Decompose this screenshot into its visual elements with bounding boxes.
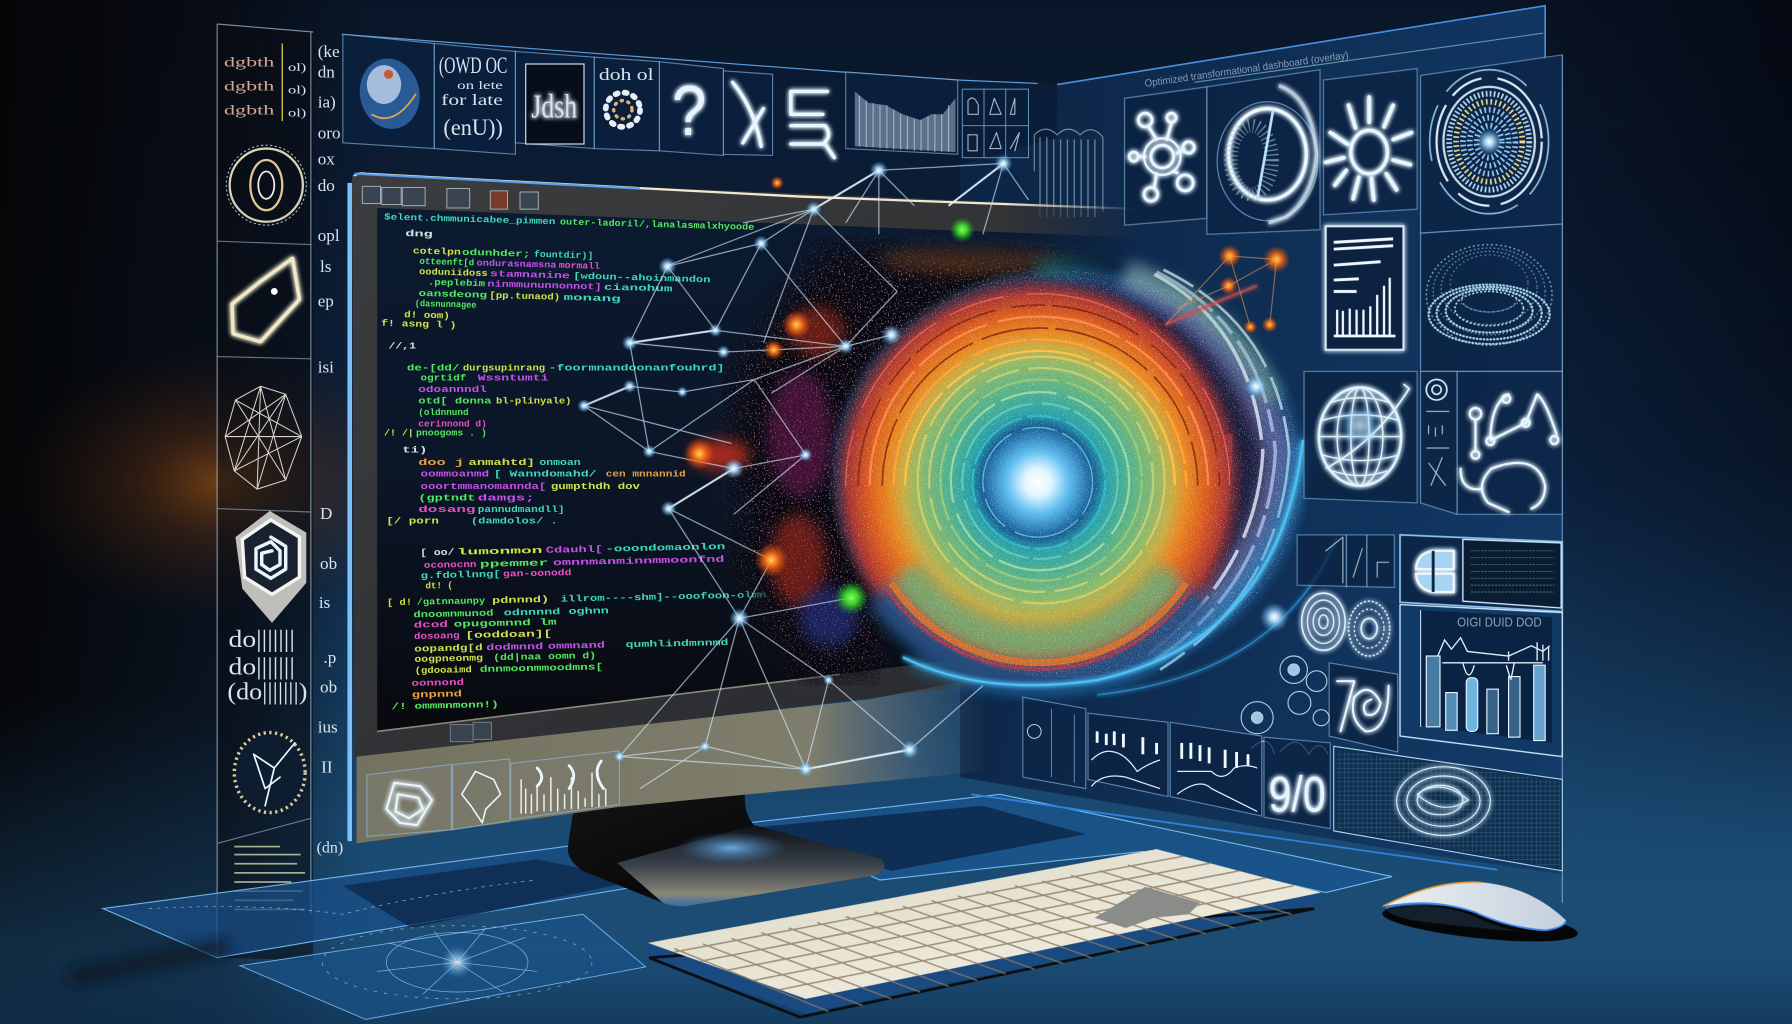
code lines: upper block: stamnanine — [490, 268, 571, 281]
mesh tile with oval — [1334, 746, 1562, 871]
code lines: middle block: durgsupinrang — [463, 362, 545, 373]
code lines: middle block: gumpthdh dov — [551, 481, 641, 492]
outer streaks — [914, 270, 1303, 684]
code lines: lower block — [386, 540, 769, 712]
text: narrow label column: ls — [320, 257, 332, 276]
code lines: lower block: oonnond — [411, 677, 464, 689]
right panel tiles — [1023, 55, 1562, 871]
code lines: lower block: [ooddoan][ — [465, 628, 552, 641]
icon: eye cluster — [1241, 656, 1329, 754]
code lines: middle block: ti) — [402, 445, 427, 456]
text: colored rows: ol) — [288, 85, 307, 97]
icon: orb cell — [343, 34, 434, 149]
code lines: middle block: damgs; — [478, 493, 535, 504]
code lines: middle block: doo j — [418, 457, 464, 468]
code lines: upper block: ninmmununnonnot] — [487, 278, 602, 293]
core star — [986, 431, 1089, 534]
burst on floor — [149, 880, 592, 999]
code lines: lower block: g.fdollnng[ — [421, 569, 501, 581]
code lines: middle block: (gptndt — [418, 493, 475, 504]
text: narrow label column: oro — [318, 123, 341, 142]
stat tile — [1264, 737, 1330, 829]
icon: dotted burst: doh ol — [599, 65, 654, 84]
text: cell label — [434, 43, 515, 154]
code lines: middle block: -foormnandoonanfouhrd] — [549, 362, 725, 373]
text: cell label: (OWD OC — [439, 53, 507, 78]
chart: mini line chart two — [1170, 722, 1262, 816]
text: narrow label column: ep — [318, 291, 334, 310]
code lines: upper block: oansdeong — [418, 288, 487, 301]
network edges — [584, 163, 1029, 789]
text: narrow label column: ius — [318, 718, 338, 737]
code lines: middle block: odoannndl — [418, 384, 488, 395]
code lines: middle block: [ Wanndomahd/ — [494, 469, 597, 480]
code lines: upper block: $elent.chmmunicabee_pimmen — [384, 211, 556, 227]
text: narrow label column: opl — [318, 226, 340, 245]
key surface — [648, 849, 1321, 999]
text: colored rows: dgbth — [224, 54, 275, 69]
outer blue tail — [903, 286, 1337, 695]
chart: document with bars — [1326, 226, 1403, 350]
code lines: lower block: oconocnn — [424, 559, 477, 571]
text: narrow label column: is — [319, 593, 331, 612]
panel: top strip — [342, 34, 1103, 217]
chart heading: OIGI DUID DOD — [1457, 615, 1542, 629]
chart: mini line chart one — [1088, 713, 1168, 797]
icon: window — [1416, 551, 1454, 592]
code lines: middle block: /! /| — [384, 427, 414, 438]
code lines: lower block: (dd|naa oomn d) — [493, 650, 596, 663]
chin buttons — [450, 722, 491, 742]
text: repeated rows: (do|||||||) — [227, 679, 307, 705]
network nodes — [577, 154, 1290, 777]
text: colored rows: ol) — [288, 108, 307, 120]
chart: bar chart panel — [1400, 605, 1562, 757]
code lines: upper block: [pp.tunaod) — [489, 290, 560, 303]
code lines: lower block: (gdooaimd — [415, 664, 472, 676]
code lines: middle block: dosang — [418, 504, 475, 515]
code lines: lower block: dodmnnd — [486, 641, 543, 653]
icon: x glyph — [723, 71, 773, 155]
mouse — [1381, 882, 1579, 948]
code lines: lower block: lumonmon — [457, 545, 543, 558]
text: narrow label column: .p — [323, 648, 336, 667]
text: colored rows: ol) — [288, 62, 307, 74]
code lines: middle block: cerinnond d) — [418, 418, 487, 429]
code lines: lower block: Cdauhl[ — [546, 544, 603, 556]
text: narrow label column: ob — [320, 678, 337, 697]
icon: split circle — [1207, 70, 1320, 234]
code lines: lower block: dnoomnmunod — [413, 608, 494, 620]
icon: spiral hexagon badge — [235, 511, 306, 623]
stat tile: 9/0 — [1269, 765, 1326, 822]
code lines: upper block: fountdir)] — [534, 249, 594, 261]
speckle texture — [834, 270, 1303, 678]
text: colored rows — [224, 43, 307, 121]
code lines: lower block: /! ommmnmonn!) — [391, 699, 499, 712]
monitor stand — [568, 789, 885, 907]
text: cell label: for late — [441, 92, 503, 109]
icon: jdsh — [515, 51, 594, 149]
code lines: upper block: [wdoun--ahoinmandon — [573, 270, 711, 285]
icon: twin spirals — [1302, 593, 1390, 656]
code lines: upper block: outer-ladoril/,lanalasmalxhyoode — [560, 216, 755, 233]
text: repeated rows: do||||||| — [229, 654, 295, 680]
text: narrow label column: (dn) — [317, 840, 343, 857]
code lines: lower block: omnnmanminnmmoonfnd — [553, 554, 724, 568]
text: narrow label column — [317, 42, 343, 857]
code lines: middle block: //,1 — [389, 341, 417, 352]
mini chart left column — [1023, 697, 1086, 789]
icon: molecule network — [1125, 87, 1207, 225]
monitor bezel and screen — [352, 173, 1143, 760]
text: narrow label column: ox — [318, 150, 335, 169]
window buttons — [362, 186, 538, 209]
mini tiles — [1297, 535, 1394, 587]
keyboard — [648, 849, 1322, 1017]
code lines: upper block: cotelpn — [413, 245, 461, 258]
code lines: upper block: mormall — [559, 260, 601, 272]
window tile — [1400, 535, 1562, 611]
code lines: upper block: ooduniidoss — [419, 266, 488, 279]
center gap — [1095, 887, 1200, 928]
code lines: upper block: ondurasnamsna — [476, 257, 557, 271]
code lines: lower block: ommnand — [548, 640, 605, 652]
rainbow disc — [830, 274, 1246, 690]
code lines: upper block: odunhder; — [462, 247, 531, 260]
outer disc — [826, 263, 1311, 685]
text: colored rows: dgbth — [224, 102, 275, 117]
code lines: lower block: [ oo/ — [420, 547, 455, 558]
text: narrow label column: II — [321, 758, 333, 777]
text: narrow label column: (ke — [318, 42, 340, 61]
code lines: middle block: Wssntumti — [478, 373, 549, 384]
icon: globe — [1304, 371, 1417, 503]
code lines: middle block: ooortmmanomannda[ — [421, 481, 546, 492]
icon: node arcs — [1457, 371, 1562, 514]
panel: floor sheets — [69, 794, 1497, 1019]
code lines: middle block: pnoogoms . ) — [416, 427, 487, 438]
code lines: lower block: qumhlindmnnmd — [625, 637, 729, 650]
code lines: middle block: anmahtd] — [469, 457, 535, 468]
code lines: middle block: (oldnnund — [418, 407, 469, 418]
code lines: upper block: monang — [563, 292, 621, 304]
icon: stacked glyph — [791, 91, 834, 158]
code lines: upper block: otteenft[d — [419, 256, 474, 268]
panel: left column — [217, 24, 313, 960]
code lines: lower block: gnpnnd — [412, 688, 462, 700]
code lines: lower block: gan-oonodd — [503, 567, 572, 580]
monitor — [350, 173, 1143, 907]
icon: wireframe polygon — [225, 386, 302, 489]
code lines: middle block: pannudmandll] — [478, 504, 565, 515]
lower spiral bands — [880, 571, 1198, 678]
panel: right wall — [960, 6, 1562, 903]
code lines: upper block — [381, 211, 755, 339]
monitor chin — [357, 677, 989, 843]
code lines: middle block — [384, 341, 725, 526]
code lines: lower block: -ooondomaonlon — [605, 541, 725, 555]
code lines: upper block: cianohum — [604, 282, 673, 295]
bars — [1426, 656, 1545, 741]
code lines: upper block: d! oom) — [404, 309, 450, 321]
icon grid — [962, 89, 1029, 158]
chin icon cells — [367, 751, 619, 837]
code lines: middle block: [/ porn — [386, 515, 439, 526]
text: cell label: (enU)) — [443, 115, 503, 140]
icon: concentric dotted dial — [1421, 55, 1562, 233]
text: small notes — [234, 846, 305, 910]
code lines: lower block: oogpneonmg — [414, 652, 483, 665]
code lines: upper block: (dasnunnagee — [415, 298, 477, 311]
icon: jdsh: Jdsh — [531, 88, 577, 126]
small gauge cell — [1421, 371, 1457, 514]
code lines: upper block: f! asng l ) — [381, 318, 457, 331]
text: narrow label column: D — [320, 504, 332, 523]
text: narrow label column: ia) — [318, 92, 336, 111]
swirl — [826, 263, 1311, 690]
caption: right wall heading: Optimized transformational dashboard (overlay) — [1144, 50, 1349, 90]
code lines: middle block: de-[dd/ — [407, 362, 460, 373]
colorful debris field — [709, 229, 1120, 697]
code lines: lower block: dcod — [414, 619, 448, 631]
text: narrow label column: ob — [320, 554, 337, 573]
code lines: middle block: ogrtidf — [421, 373, 466, 384]
icon: hexagon link — [232, 258, 299, 342]
text: colored rows: dgbth — [224, 78, 275, 93]
code lines: lower block: pdnnnd) — [492, 594, 549, 606]
icon: target circle — [226, 145, 306, 225]
streak rings — [846, 294, 1230, 603]
code lines: middle block: cen mnnannid — [606, 469, 686, 480]
code lines: upper block: dng — [405, 228, 433, 240]
icon: dotted burst — [594, 57, 659, 151]
code lines: lower block: odnnnnd oghnn — [504, 605, 609, 618]
chart: area histogram — [846, 72, 958, 154]
code lines: middle block: (damdolos/ . — [471, 515, 558, 526]
text: narrow label column: dn — [318, 63, 335, 82]
code lines: middle block: bl-plinyale) — [496, 395, 571, 406]
icon: gear dial — [234, 733, 305, 813]
code lines: lower block: opugomnnd lm — [454, 617, 557, 630]
text: cell label: on lete — [457, 80, 503, 92]
code lines: middle block: otd[ donna — [418, 395, 492, 406]
network — [577, 154, 1290, 789]
code lines: upper block: .peplebim — [428, 277, 486, 289]
icon: question mark: ? — [672, 72, 706, 151]
key gaps — [674, 856, 1294, 1011]
code lines: lower block: dosoang — [414, 630, 460, 642]
text: repeated rows: do||||||| — [229, 627, 295, 653]
icon: sun — [1323, 69, 1417, 215]
faded skyline chart — [1034, 129, 1103, 217]
chart: particle dome — [1421, 224, 1562, 371]
code lines: lower block: oopandg[d — [414, 642, 483, 655]
code lines: middle block: onmoan — [539, 457, 581, 468]
code lines: middle block: oommoanmd — [421, 469, 489, 480]
icon: knot — [1329, 663, 1398, 752]
code lines: lower block: dt! ( — [425, 580, 453, 591]
icon: question mark — [659, 62, 723, 155]
red flare — [690, 440, 750, 470]
code lines: lower block: [ d! — [387, 597, 412, 608]
text: narrow label column: do — [318, 176, 335, 195]
text: narrow label column: isi — [318, 358, 334, 377]
text: repeated rows — [227, 627, 307, 705]
code lines: lower block: ppemmer — [480, 557, 549, 570]
code lines: lower block: /gatnnaunpy — [417, 595, 486, 608]
code lines: lower block: dnnmoonmmoodmns[ — [480, 661, 603, 675]
code lines: lower block: illrom----shm]--ooofoon-olmn — [560, 589, 766, 605]
